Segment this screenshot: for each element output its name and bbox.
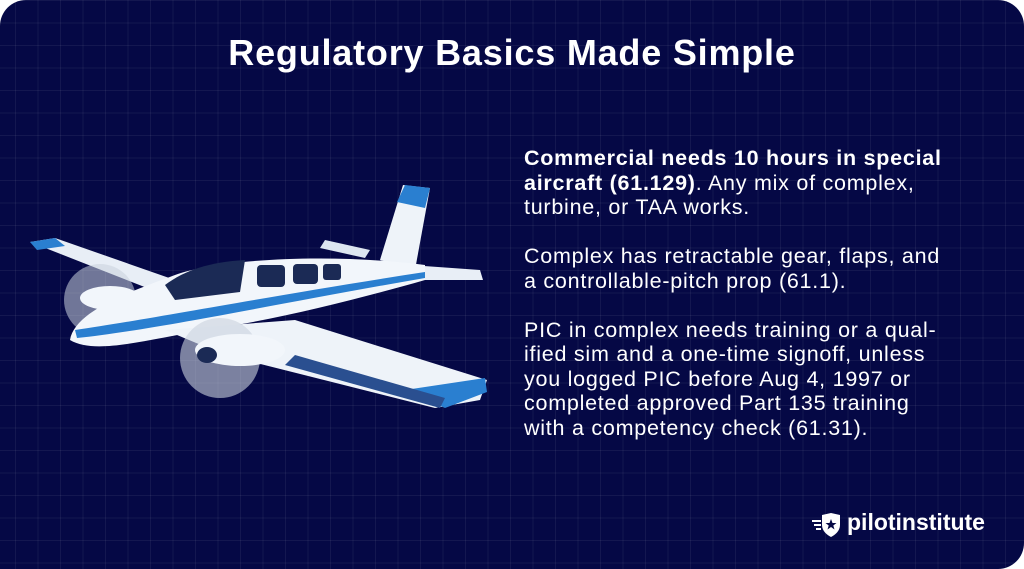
- logo: pilotinstitute: pilotinstitute: [847, 509, 985, 535]
- text block: [524, 146, 942, 440]
- paragraph 3: completed approved Part 135 training: [524, 391, 910, 415]
- tail: [320, 185, 483, 280]
- paragraph 1: turbine, or TAA works.: [524, 195, 750, 219]
- right wing (far): [30, 238, 175, 295]
- far propeller: [64, 264, 136, 336]
- paragraph 1: [524, 146, 942, 219]
- paragraph 2: Complex has retractable gear, flaps, and: [524, 244, 940, 268]
- near wing: [165, 320, 487, 408]
- illustration: twin-engine airplane: [30, 185, 487, 408]
- paragraph 3: PIC in complex needs training or a qual-: [524, 318, 936, 342]
- paragraph 1: aircraft (61.129). Any mix of complex,: [524, 170, 915, 194]
- paragraph 3: with a competency check (61.31).: [524, 416, 868, 440]
- paragraph 2: [524, 244, 940, 292]
- near engine and propeller: [180, 318, 285, 398]
- paragraph 3: you logged PIC before Aug 4, 1997 or: [524, 366, 911, 390]
- paragraph 3: ified sim and a one-time signoff, unless: [524, 342, 925, 366]
- paragraph 2: a controllable-pitch prop (61.1).: [524, 268, 846, 292]
- paragraph 3: [524, 318, 936, 440]
- title: Regulatory Basics Made Simple: [228, 32, 796, 73]
- fuselage: [70, 258, 425, 346]
- paragraph 1: Commercial needs 10 hours in special: [524, 146, 942, 170]
